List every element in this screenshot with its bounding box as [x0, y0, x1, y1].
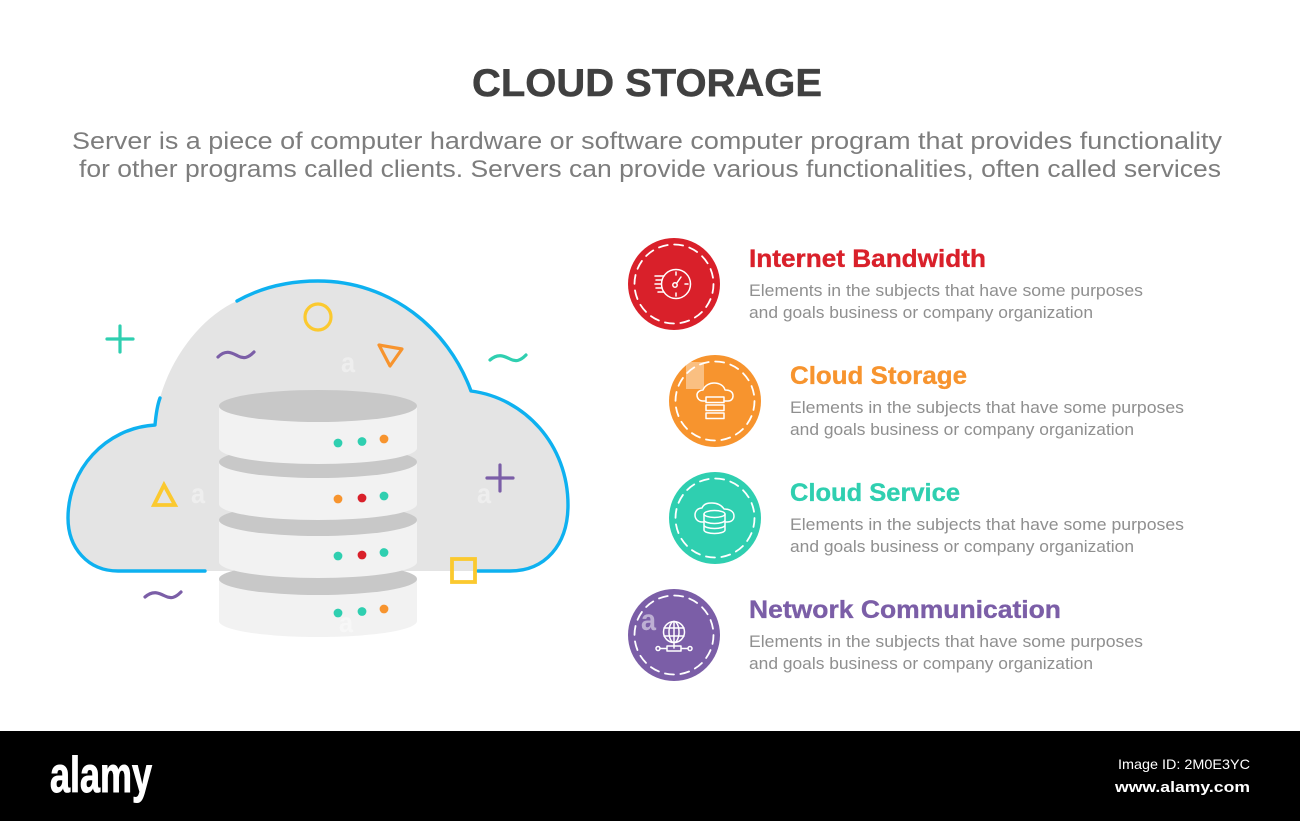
icon: cloud with server racks badge [669, 355, 761, 447]
description [790, 515, 1184, 556]
image id: Image ID: 2M0E3YC [1118, 756, 1250, 772]
cloud fill [68, 281, 568, 571]
watermark glyphs: a [341, 347, 355, 378]
panel: network communication [628, 589, 1143, 681]
heading: Network Communication [749, 596, 1061, 624]
subtitle text block: Server is a piece of computer hardware or software computer program that provides functionality [72, 128, 1223, 155]
panel: cloud server illustration [68, 281, 568, 638]
description [749, 281, 1143, 322]
icon: globe network badge [628, 589, 720, 681]
watermark glyphs: a [191, 478, 205, 509]
heading: Cloud Storage [790, 362, 967, 390]
decorative shapes [107, 304, 526, 598]
website: www.alamy.com [1114, 779, 1250, 796]
database server stack [219, 390, 417, 637]
panel: internet bandwidth [628, 238, 1143, 330]
watermark glyphs [191, 347, 491, 638]
description: and goals business or company organization [749, 654, 1093, 673]
description: Elements in the subjects that have some purposes [749, 632, 1143, 651]
subtitle text block: for other programs called clients. Servers can provide various functionalities, often called services [79, 156, 1221, 183]
description: Elements in the subjects that have some purposes [790, 515, 1184, 534]
description: and goals business or company organization [790, 537, 1134, 556]
alamy logo: alamy [50, 747, 152, 803]
description [749, 632, 1143, 673]
description: Elements in the subjects that have some purposes [790, 398, 1184, 417]
heading: Cloud Service [790, 479, 960, 507]
panel: cloud storage [669, 355, 1184, 447]
heading: Internet Bandwidth [749, 245, 986, 273]
icon: globe network badge: a [641, 604, 656, 637]
icon: speedometer badge [628, 238, 720, 330]
description: and goals business or company organization [749, 303, 1093, 322]
cloud outline [68, 281, 568, 571]
title: CLOUD STORAGE [472, 62, 822, 105]
icon: cloud with database badge [669, 472, 761, 564]
footer bar [0, 731, 1300, 821]
watermark glyphs: a [339, 607, 353, 638]
panel: cloud service [669, 472, 1184, 564]
subtitle text block [72, 128, 1223, 183]
watermark glyphs: a [477, 478, 491, 509]
description: Elements in the subjects that have some purposes [749, 281, 1143, 300]
description: and goals business or company organization [790, 420, 1134, 439]
description [790, 398, 1184, 439]
